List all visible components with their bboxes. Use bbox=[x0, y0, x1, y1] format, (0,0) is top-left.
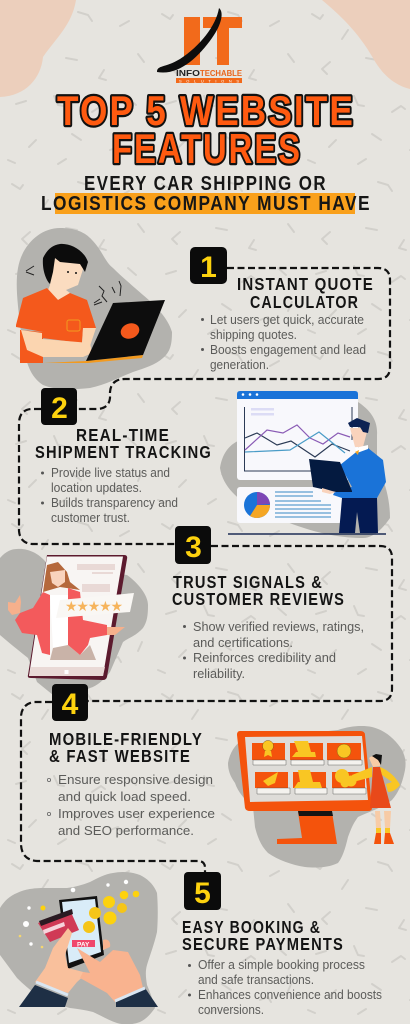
title bbox=[57, 87, 355, 172]
heading 1: CALCULATOR bbox=[250, 292, 359, 312]
heading 3: TRUST SIGNALS & bbox=[173, 572, 323, 592]
heading 3 bbox=[172, 572, 345, 609]
badge 3 bbox=[175, 526, 211, 564]
text 1: Boosts engagement and lead bbox=[210, 342, 366, 357]
heading 2 bbox=[35, 425, 212, 462]
text 2: customer trust. bbox=[51, 510, 130, 525]
text 2: location updates. bbox=[51, 480, 142, 495]
logo bbox=[157, 8, 242, 84]
text 4: and SEO performance. bbox=[58, 823, 194, 838]
subtitle bbox=[41, 173, 371, 215]
illustration: mobile payment: PAY bbox=[77, 942, 90, 948]
heading 5 bbox=[182, 917, 344, 954]
title: TOP 5 WEBSITE bbox=[57, 87, 355, 134]
badge 3: 3 bbox=[185, 531, 202, 564]
title: FEATURES bbox=[112, 125, 302, 172]
badge 5 bbox=[184, 872, 221, 910]
text 3: Show verified reviews, ratings, bbox=[193, 619, 364, 634]
text 3: Reinforces credibility and bbox=[193, 650, 336, 665]
text 1: shipping quotes. bbox=[210, 327, 297, 342]
illustration: dashboard monitor with woman bbox=[228, 726, 406, 868]
badge 1 bbox=[190, 247, 227, 284]
text 2 bbox=[41, 465, 178, 525]
text 3 bbox=[183, 619, 364, 681]
text 1: Let users get quick, accurate bbox=[210, 312, 364, 327]
text 4: Ensure responsive design bbox=[58, 772, 213, 787]
text 2: Builds transparency and bbox=[51, 495, 178, 510]
illustration: person at laptop bbox=[16, 228, 172, 389]
text 5: conversions. bbox=[198, 1002, 264, 1017]
badge 5: 5 bbox=[194, 877, 211, 910]
heading 4: MOBILE-FRIENDLY bbox=[49, 729, 203, 749]
illustration: mobile payment bbox=[0, 872, 158, 1024]
text 5 bbox=[188, 957, 382, 1017]
text 4: and quick load speed. bbox=[58, 789, 191, 804]
badge 4 bbox=[52, 684, 88, 721]
heading 5: EASY BOOKING & bbox=[182, 917, 321, 937]
text 5: Offer a simple booking process bbox=[198, 957, 365, 972]
illustration: analytics dashboard with man bbox=[220, 391, 390, 538]
text 5: Enhances convenience and boosts bbox=[198, 987, 382, 1002]
illustration: phone with customer review bbox=[0, 549, 148, 695]
badge 1: 1 bbox=[200, 251, 217, 284]
heading 2: SHIPMENT TRACKING bbox=[35, 442, 212, 462]
text 1 bbox=[201, 312, 366, 372]
logo: INFO bbox=[176, 68, 200, 78]
text 4: Improves user experience bbox=[58, 806, 215, 821]
text 3: and certifications. bbox=[193, 635, 293, 650]
heading 1 bbox=[237, 274, 374, 312]
subtitle: EVERY CAR SHIPPING OR bbox=[84, 173, 327, 195]
heading 4: & FAST WEBSITE bbox=[49, 746, 191, 766]
text 1: generation. bbox=[210, 357, 269, 372]
heading 5: SECURE PAYMENTS bbox=[182, 934, 344, 954]
badge 4: 4 bbox=[62, 688, 79, 721]
text 3: reliability. bbox=[193, 666, 245, 681]
badge 2 bbox=[41, 388, 77, 425]
badge 2: 2 bbox=[51, 392, 68, 425]
text 5: and safe transactions. bbox=[198, 972, 314, 987]
logo: TECHABLE bbox=[200, 68, 242, 78]
heading 2: REAL-TIME bbox=[76, 425, 170, 445]
text 2: Provide live status and bbox=[51, 465, 170, 480]
heading 3: CUSTOMER REVIEWS bbox=[172, 589, 345, 609]
logo: SOLUTIONS bbox=[179, 78, 239, 84]
heading 4 bbox=[49, 729, 203, 766]
heading 1: INSTANT QUOTE bbox=[237, 274, 374, 294]
illustration: phone with customer review: ★★★★★ bbox=[65, 598, 123, 614]
text 4 bbox=[47, 772, 215, 838]
dashed connector path bbox=[19, 268, 392, 872]
